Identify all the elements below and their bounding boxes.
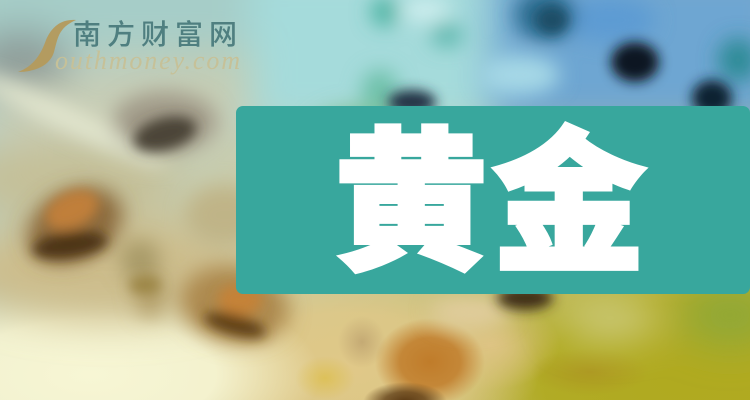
panel: title banner [236,106,750,294]
logo Chinese name: 南方财富网 [73,13,237,53]
icon: gold S swoosh [18,20,76,72]
logo: Southmoney [18,13,240,75]
title: 黄 [334,79,488,302]
logo URL: outhmoney.com [55,46,240,75]
title [334,79,648,302]
title: 金 [492,79,646,302]
